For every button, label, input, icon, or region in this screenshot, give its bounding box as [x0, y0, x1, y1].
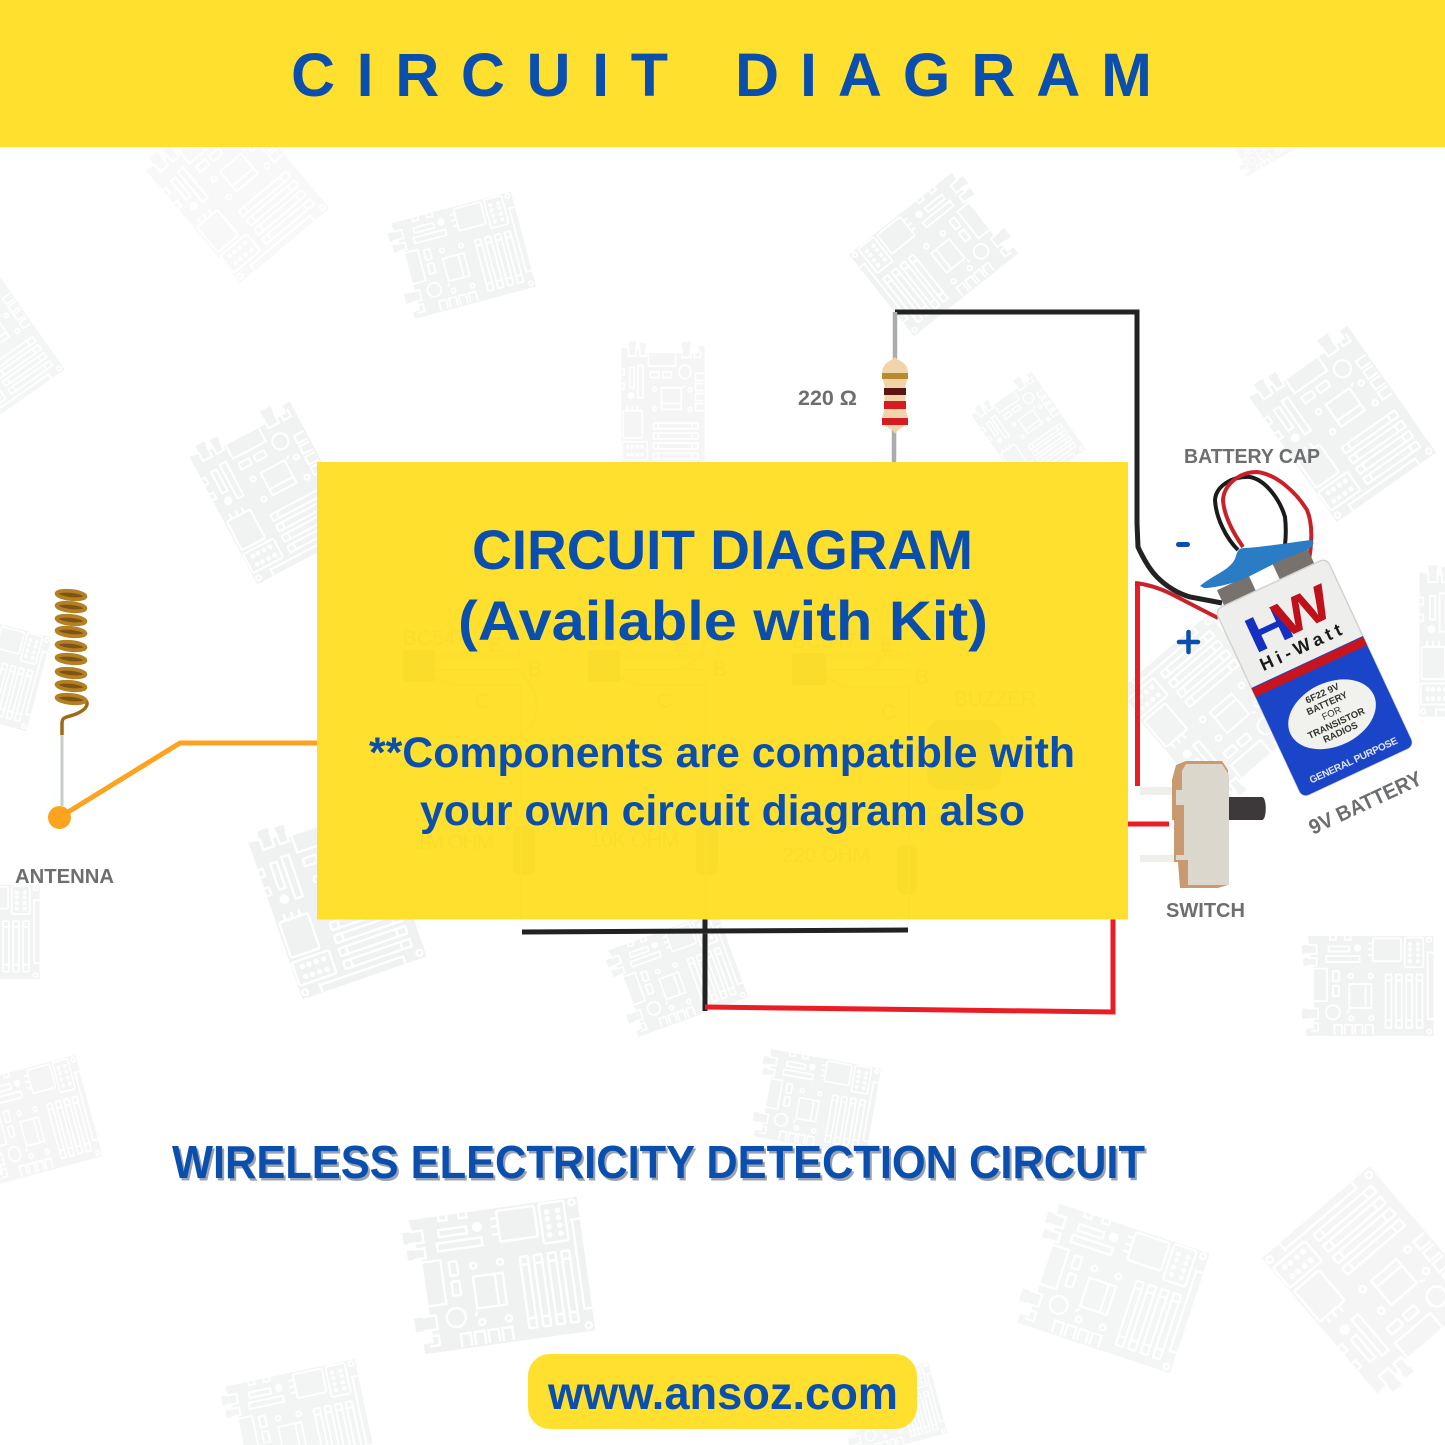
plus sign — [1179, 632, 1198, 652]
ghost circuit under panel: B — [915, 666, 929, 689]
label: battery cap: BATTERY CAP — [1184, 446, 1320, 468]
title — [291, 41, 1152, 109]
panel heading: CIRCUIT DIAGRAM — [472, 518, 973, 581]
battery oval text: TRANSISTOR — [1306, 706, 1367, 742]
ghost circuit under panel: C — [475, 690, 490, 713]
wire: red from battery to switch — [1135, 583, 1140, 786]
wire: red to switch — [1128, 822, 1169, 826]
battery general purpose: GENERAL PURPOSE — [1308, 736, 1400, 786]
panel: circuit diagram notice — [317, 462, 1128, 920]
panel note line 2: your own circuit diagram also — [420, 787, 1025, 835]
label: 9V battery: 9V BATTERY — [1305, 767, 1426, 840]
ghost circuit under panel: 220 OHM — [782, 844, 870, 867]
ghost circuit under panel: 10K OHM — [590, 829, 679, 852]
battery oval text: 6F22 9V — [1304, 681, 1342, 706]
ghost circuit under panel: BC547 — [403, 627, 467, 650]
header banner — [0, 0, 1445, 147]
ghost circuit under panel: BC547 — [792, 630, 856, 653]
battery cap wires — [1215, 472, 1311, 565]
ghost circuit under panel: B — [713, 658, 727, 681]
label: switch: SWITCH — [1166, 900, 1245, 922]
wire: black bottom rail — [522, 919, 908, 1011]
9V battery — [1215, 558, 1414, 798]
wire: black from resistor to battery cap — [895, 312, 1222, 603]
ghost circuit under panel: C — [657, 690, 672, 713]
ghost circuit under panel: BUZZER — [954, 688, 1036, 711]
resistor 220 ohm — [882, 312, 908, 464]
ghost circuit under panel: C — [881, 701, 896, 724]
battery brand: Hi-Watt — [1257, 620, 1345, 675]
website pill — [528, 1354, 917, 1429]
battery oval text: RADIOS — [1322, 720, 1360, 746]
battery label oval — [1277, 666, 1387, 763]
ghost circuit under panel: B — [528, 658, 542, 681]
battery cap snaps — [1217, 545, 1314, 610]
ghost circuit under panel: E — [880, 634, 894, 657]
wire: red bottom loop — [705, 919, 1113, 1012]
wire: orange antenna lead — [60, 743, 320, 817]
battery oval text — [1292, 676, 1371, 751]
title: CIRCUIT — [291, 41, 668, 109]
title: DIAGRAM — [735, 41, 1152, 109]
battery oval text: BATTERY — [1305, 689, 1350, 718]
battery logo H: H — [1236, 594, 1302, 664]
label: 220 ohm: 220 Ω — [798, 387, 857, 410]
antenna coil — [56, 590, 87, 806]
circuit name with shadow: WIRELESS ELECTRICITY DETECTION CIRCUIT — [174, 1138, 1147, 1190]
slide switch — [1140, 761, 1266, 888]
ghost circuit under panel: BC547 — [588, 627, 652, 650]
website url: www.ansoz.com — [547, 1367, 898, 1419]
label: antenna: ANTENNA — [15, 866, 114, 888]
battery oval text: FOR — [1320, 705, 1343, 723]
battery cap — [1200, 540, 1313, 588]
ghost circuit under panel: E — [489, 634, 503, 657]
circuit name with shadow: WIRELESS ELECTRICITY DETECTION CIRCUIT — [172, 1136, 1145, 1188]
antenna terminal dot — [48, 806, 71, 829]
panel note line 1: **Components are compatible with — [369, 729, 1075, 777]
panel subheading: (Available with Kit) — [458, 589, 988, 652]
ghost circuit under panel — [403, 627, 1036, 919]
minus sign — [1176, 542, 1190, 547]
wire: red lead from battery — [1135, 583, 1218, 618]
ghost circuit under panel: E — [674, 634, 688, 657]
battery logo W: W — [1265, 573, 1342, 649]
ghost circuit under panel: 1M OHM — [416, 831, 494, 854]
